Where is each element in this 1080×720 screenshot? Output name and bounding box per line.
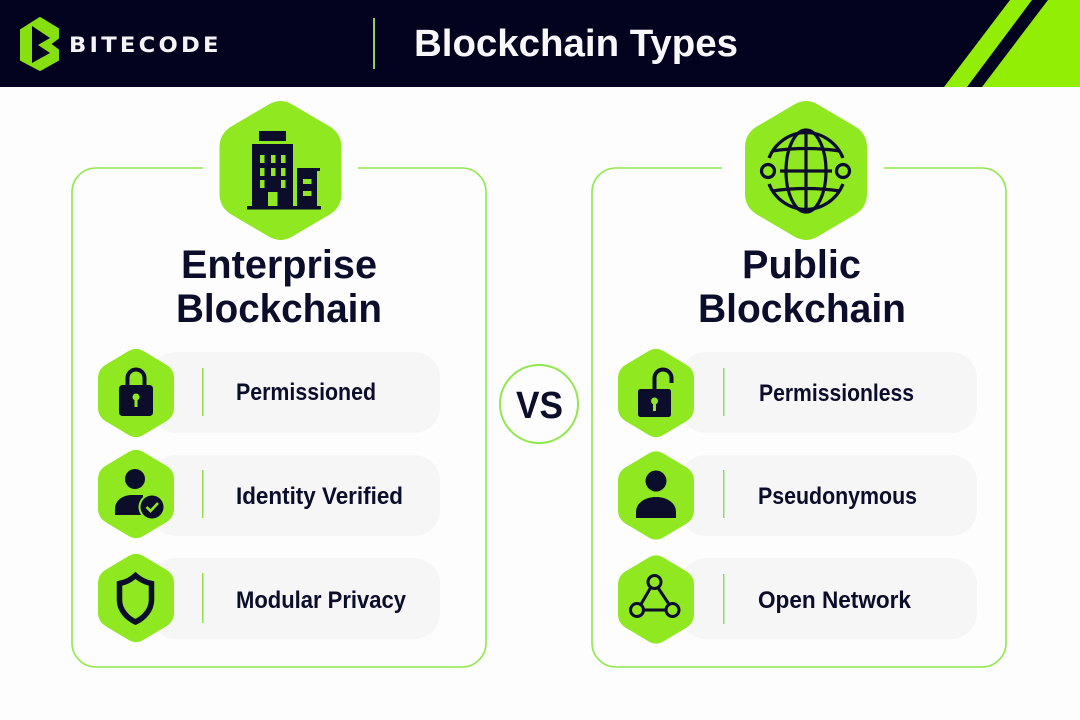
heading: public blockchain <box>698 243 906 331</box>
row: pseudonymous: Pseudonymous <box>758 483 917 510</box>
heading: public blockchain: Public <box>742 243 861 287</box>
row: identity verified <box>98 450 440 538</box>
panel: public blockchain <box>592 101 1006 667</box>
heading: enterprise blockchain: Blockchain <box>176 287 382 331</box>
heading: enterprise blockchain: Enterprise <box>181 243 377 287</box>
row: permissionless: Permissionless <box>759 380 914 407</box>
row: permissionless <box>618 349 977 437</box>
row: permissioned <box>98 349 440 437</box>
header bar <box>0 0 1080 87</box>
row: pseudonymous <box>618 451 977 540</box>
row: identity verified: Identity Verified <box>236 483 403 510</box>
row: modular privacy: Modular Privacy <box>236 587 407 614</box>
row: permissioned: Permissioned <box>236 379 376 406</box>
heading: public blockchain: Blockchain <box>698 287 906 331</box>
title: Blockchain Types <box>414 23 738 65</box>
row: modular privacy <box>98 554 440 642</box>
vs badge: VS <box>516 385 563 427</box>
panel: enterprise blockchain <box>72 101 486 667</box>
logo: Bitecode <box>21 18 222 70</box>
vs badge <box>500 365 578 443</box>
logo: Bitecode: BITECODE <box>69 34 222 58</box>
icon: globe <box>745 101 867 240</box>
row: open network <box>618 555 977 644</box>
row: open network: Open Network <box>758 587 912 614</box>
heading: enterprise blockchain <box>176 243 382 331</box>
icon: building <box>220 101 342 240</box>
